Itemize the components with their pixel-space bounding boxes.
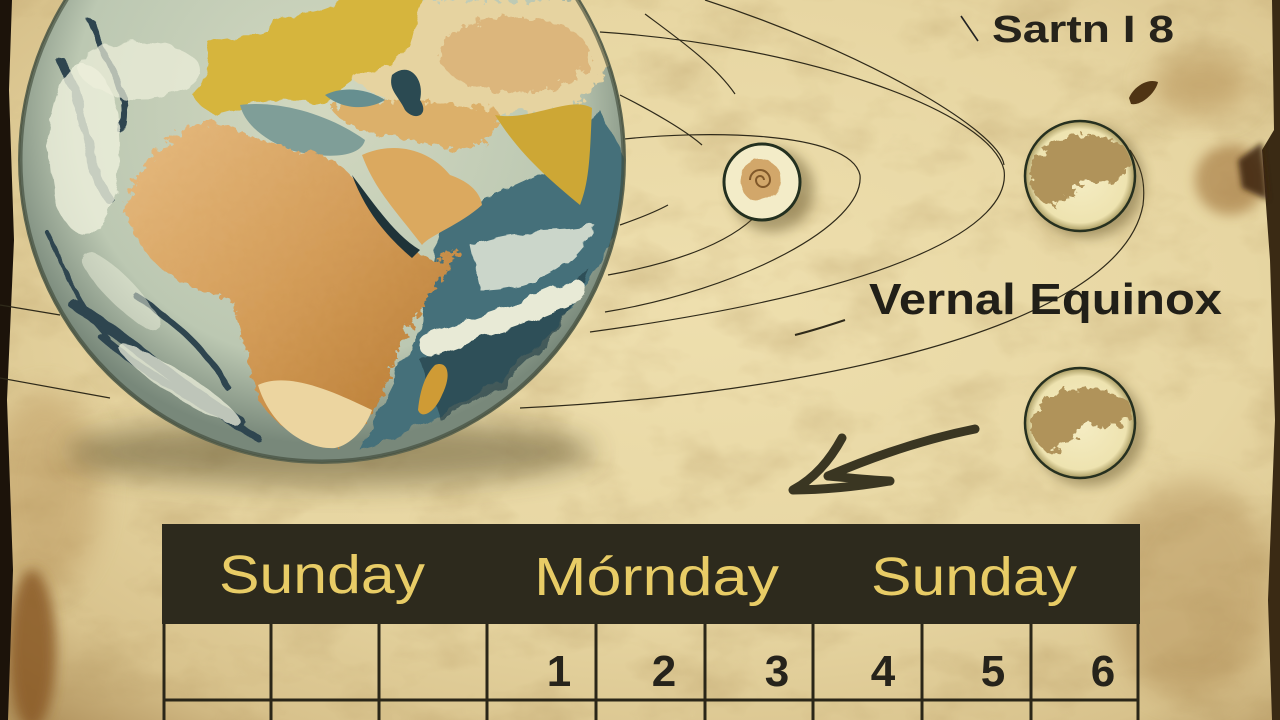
calendar numbers: 2 — [652, 647, 676, 696]
asia tan — [352, 0, 609, 116]
top right label: Sartn I 8 — [992, 9, 1174, 51]
calendar numbers: 3 — [765, 647, 789, 696]
globe — [18, 0, 630, 486]
arrow — [793, 429, 975, 490]
calendar numbers: 5 — [981, 647, 1005, 696]
ocean streaks — [45, 20, 260, 440]
calendar numbers: 1 — [547, 647, 571, 696]
africa — [125, 122, 458, 446]
calendar header: Mórnday — [534, 547, 779, 607]
mediterranean — [240, 104, 365, 156]
red sea — [352, 175, 420, 258]
black sea — [391, 70, 423, 116]
madagascar — [418, 364, 448, 414]
calendar grid — [164, 624, 1138, 720]
calendar header — [162, 524, 1140, 624]
moon lower — [1025, 368, 1144, 486]
caspian — [325, 90, 385, 107]
orbit lines — [0, 0, 1144, 408]
clouds — [49, 42, 246, 432]
arabia — [362, 148, 482, 245]
calendar — [162, 524, 1140, 720]
calendar numbers — [547, 647, 1115, 696]
label: vernal equinox: Vernal Equinox — [869, 275, 1223, 324]
calendar header: Sunday — [219, 545, 425, 605]
india — [495, 104, 592, 205]
indian ocean — [360, 110, 630, 450]
moon upper — [1025, 121, 1144, 238]
south africa — [258, 380, 372, 448]
calendar numbers: 6 — [1091, 647, 1115, 696]
middle east — [330, 100, 500, 150]
europe — [190, 0, 425, 115]
calendar header: Sunday — [871, 547, 1077, 607]
calendar numbers: 4 — [871, 647, 896, 696]
small moon — [724, 144, 814, 232]
